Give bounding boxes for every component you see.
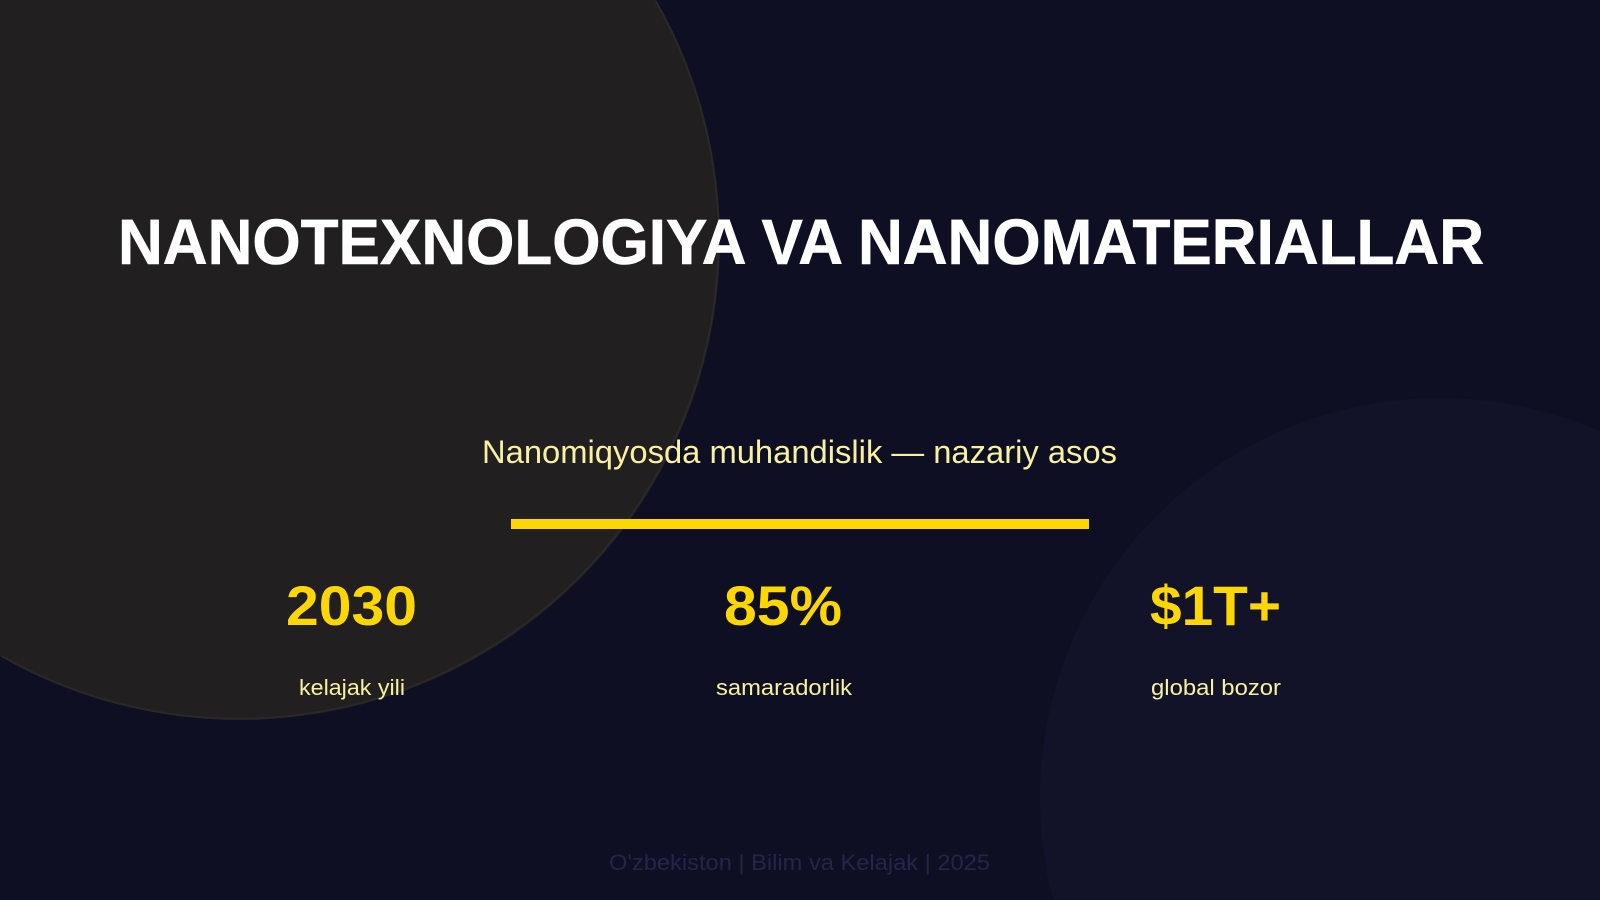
title: NANOTEXNOLOGIYA VA NANOMATERIALLAR: [118, 206, 1484, 278]
decorative circle: bottom-right: [1040, 398, 1600, 900]
stat: $1T+ global bozor: [1150, 574, 1281, 700]
stat value: 2030: 2030: [286, 574, 417, 637]
stat: 85% samaradorlik: [716, 574, 853, 700]
decorative circle: large top-left: [0, 0, 720, 720]
subtitle: Nanomiqyosda muhandislik — nazariy asos: [482, 434, 1117, 470]
stat value: $1T+: $1T+: [1150, 574, 1281, 637]
footer: O'zbekiston | Bilim va Kelajak | 2025: [609, 850, 990, 875]
stat label: samaradorlik: samaradorlik: [716, 675, 853, 700]
stat label: global bozor: global bozor: [1151, 675, 1281, 700]
stat: 2030 kelajak yili: [286, 574, 417, 700]
accent bar: [511, 519, 1089, 529]
stat value: 85%: 85%: [724, 574, 842, 637]
stat label: kelajak yili: kelajak yili: [299, 675, 405, 700]
